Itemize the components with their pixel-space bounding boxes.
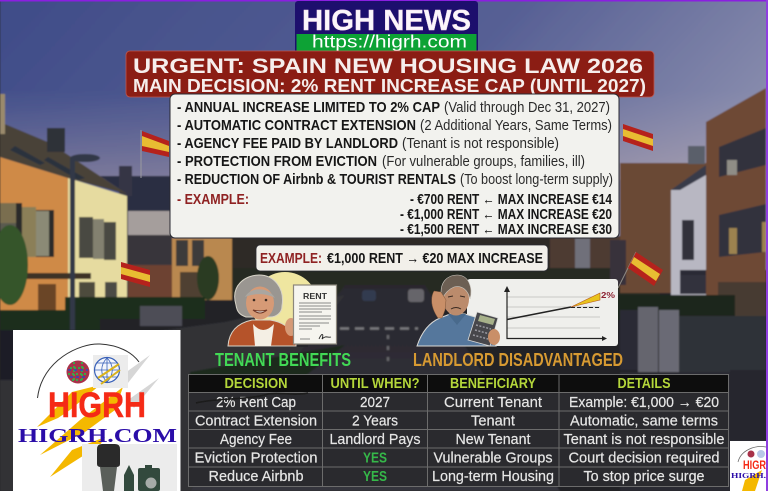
table: decisions summary: Example: €1,000 → €20: [569, 394, 719, 411]
table: decisions summary: Reduce Airbnb: [208, 468, 304, 485]
icon: tenant with rent contract: RENT: [303, 292, 327, 301]
table: decisions summary: 2027: [360, 394, 390, 411]
media tools: [82, 444, 177, 491]
distant buildings behind the example callout: [230, 236, 560, 290]
lamp post: [70, 158, 75, 330]
table: decisions summary: Tenant: [471, 412, 516, 430]
headline banner: URGENT: SPAIN NEW HOUSING LAW 2026: [133, 55, 643, 78]
mosaic globe: [66, 360, 90, 384]
icon: tenant with rent contract: [228, 272, 336, 347]
table: decisions summary: DETAILS: [618, 375, 670, 392]
header badge: HIGH NEWS: https://higrh.com: [312, 32, 467, 52]
road: [190, 285, 560, 491]
panel: key measures: (2 Additional Years, Same Terms): [420, 117, 612, 134]
parked cars: [362, 290, 376, 301]
low wall: [140, 306, 182, 326]
flag: Spain, left front: [121, 262, 150, 287]
logo: HIGRH.COM large: [13, 330, 180, 491]
right mid brown building: [620, 163, 710, 293]
flag: Spain, right rear: [623, 124, 653, 151]
left dark fence: [0, 330, 14, 380]
table: decisions summary: Tenant is not responsible: [564, 431, 724, 448]
panel: key measures: - €1,000 RENT ← MAX INCREASE €20: [400, 206, 612, 223]
panel: key measures: - REDUCTION OF Airbnb & TOURIST RENTALS: [177, 171, 456, 188]
panel: key measures: (Valid through Dec 31, 2027): [444, 99, 610, 116]
panel: key measures: - €1,500 RENT ← MAX INCREASE €30: [400, 221, 612, 238]
panel: key measures: [170, 94, 619, 238]
panel: key measures: (For vulnerable groups, families, ill): [382, 153, 585, 170]
table: decisions summary: 2% Rent Cap: [216, 394, 296, 411]
panel: key measures: - AUTOMATIC CONTRACT EXTENSION: [177, 117, 416, 134]
chart panel: landlord rent cap graph: [467, 279, 618, 346]
panel: key measures: (To boost long-term supply): [460, 171, 613, 188]
heading: landlord disadvantaged: LANDLORD DISADVANTAGED: [413, 350, 623, 370]
logo: HIGRH.COM large: HIGRH.COM: [18, 425, 177, 447]
hedge: [0, 310, 100, 330]
table: decisions summary: Eviction Protection: [194, 450, 318, 466]
cardigan: [228, 320, 296, 346]
table: decisions summary: YES: [363, 468, 387, 485]
callout: example: EXAMPLE:: [260, 250, 322, 267]
calculator: [468, 312, 498, 346]
table: decisions summary: Contract Extension: [195, 412, 317, 430]
table: decisions summary: Current Tenant: [444, 394, 543, 411]
left sidewalk: [0, 295, 345, 491]
world globe: [93, 355, 128, 388]
dark mid building left: [100, 176, 172, 300]
yellow bolts: [37, 385, 100, 427]
fence right: [678, 316, 766, 380]
tree left: [0, 225, 28, 305]
chart panel: landlord rent cap graph: 2%: [601, 290, 615, 300]
table: decisions summary: Vulnerable Groups: [434, 450, 552, 466]
panel: key measures: - PROTECTION FROM EVICTION: [177, 153, 377, 170]
hair: [235, 275, 282, 317]
header badge: HIGH NEWS: HIGH NEWS: [302, 5, 471, 37]
table: decisions summary: New Tenant: [456, 431, 531, 448]
hand on head: [432, 291, 446, 318]
headline banner: MAIN DECISION: 2% RENT INCREASE CAP (UNTIL 2027): [133, 75, 646, 96]
header badge: HIGH NEWS: [295, 1, 478, 53]
table: decisions summary: BENEFICIARY: [450, 375, 536, 392]
headline banner: [126, 51, 654, 97]
hedge right: [615, 295, 735, 320]
panel: key measures: - ANNUAL INCREASE LIMITED TO 2% CAP: [177, 99, 440, 116]
table: decisions summary: 2 Years: [352, 412, 398, 430]
face: [246, 286, 274, 320]
rent contract paper: [294, 285, 336, 344]
trees behind the road: [180, 268, 660, 296]
arc: [38, 344, 139, 398]
table: decisions summary: To stop price surge: [584, 468, 704, 485]
table: decisions summary: Long-term Housing: [432, 468, 554, 485]
table: decisions summary: Automatic, same terms: [570, 412, 718, 430]
table: decisions summary: Court decision required: [568, 450, 720, 466]
callout: example: [256, 245, 548, 271]
crosswalk dashes: [340, 327, 418, 330]
panel: key measures: (Tenant is not responsible): [402, 135, 559, 152]
table: decisions summary: Landlord Pays: [330, 431, 420, 448]
logo: HIGRH small, bottom right: [730, 441, 766, 491]
left orange house: [0, 157, 68, 312]
brand name: HIGRH: [48, 386, 146, 425]
icon: worried landlord with calculator: [417, 275, 500, 346]
hand: [285, 318, 297, 336]
logo: HIGRH small, bottom right: HIGRH.: [731, 471, 766, 480]
panel: key measures: - EXAMPLE:: [177, 191, 249, 208]
table: decisions summary: UNTIL WHEN?: [330, 375, 420, 392]
table: decisions summary: YES: [363, 450, 387, 466]
table: decisions summary: DECISION: [224, 375, 288, 392]
heading: tenant benefits: TENANT BENEFITS: [215, 350, 351, 370]
grey bolts: [118, 355, 150, 388]
panel: key measures: - AGENCY FEE PAID BY LANDLORD: [177, 135, 398, 152]
right brick building: [706, 88, 766, 320]
flag: Spain, right front: [618, 252, 663, 288]
callout: example: €1,000 RENT → €20 MAX INCREASE: [327, 250, 543, 267]
white building: [671, 172, 706, 295]
table: decisions summary: Agency Fee: [220, 431, 292, 448]
flag: Spain, left rear: [141, 130, 169, 178]
panel: key measures: - €700 RENT ← MAX INCREASE €14: [410, 191, 613, 208]
table: decisions summary: [188, 374, 729, 487]
left house windows: [0, 203, 16, 223]
